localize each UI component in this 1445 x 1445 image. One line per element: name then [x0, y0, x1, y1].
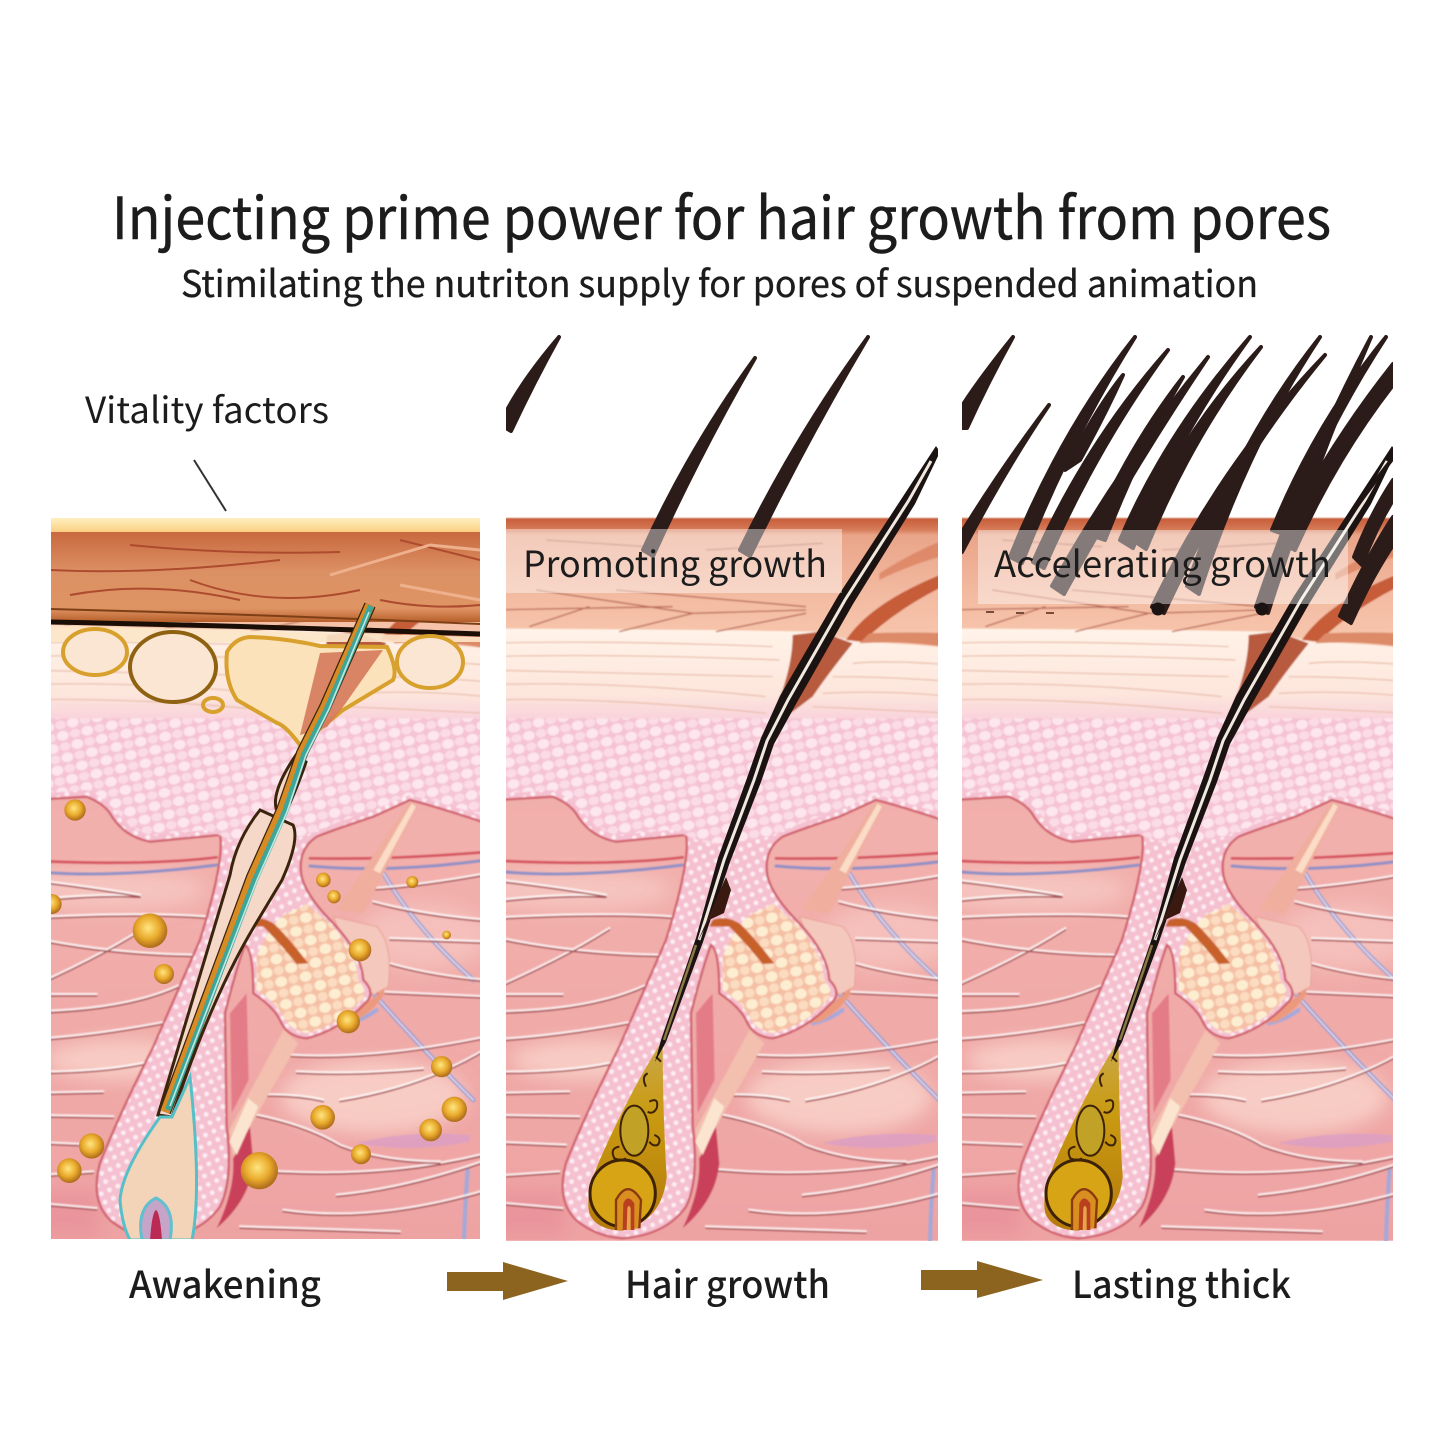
arrow: hair growth to lasting thick — [921, 1261, 1043, 1298]
caption: awakening: Awakening — [129, 1255, 321, 1309]
dense surface hairs — [962, 337, 1393, 623]
caption: lasting thick: Lasting thick — [1072, 1255, 1291, 1309]
caption: hair growth: Hair growth — [625, 1255, 830, 1309]
label: accelerating growth: Accelerating growth — [994, 536, 1331, 588]
callout leader line — [194, 460, 226, 511]
surface hairs — [506, 337, 868, 556]
second long hair strand — [1357, 458, 1393, 510]
black oil line — [51, 622, 480, 634]
dark follicle rings — [275, 755, 306, 808]
hair envelope — [158, 810, 295, 1117]
golden follicle bulb — [588, 1040, 667, 1231]
label: promoting growth: Promoting growth — [523, 536, 827, 588]
translucent label box — [506, 529, 842, 593]
long hair through follicle — [655, 446, 940, 1062]
vitality factors label: Vitality factors — [85, 382, 329, 434]
panel: promoting growth — [506, 335, 938, 1241]
hair root dots — [986, 602, 1268, 616]
oil bubbles — [63, 629, 463, 745]
brown oil layer — [51, 532, 480, 622]
follicle muscle wedge — [300, 650, 383, 735]
teal treatment hair — [165, 605, 371, 1112]
long hair through follicle — [1111, 446, 1396, 1062]
panel: accelerating growth — [962, 335, 1393, 1241]
butter top band — [51, 518, 480, 532]
subtitle: Stimilating the nutriton supply for pores of suspended animation — [181, 254, 1258, 308]
panel: awakening — [51, 518, 480, 1239]
golden nutrient balls — [42, 799, 467, 1189]
arrow: awakening to hair growth — [447, 1262, 568, 1300]
translucent label box — [978, 530, 1348, 604]
golden follicle bulb — [1044, 1040, 1123, 1231]
beige bulb — [120, 1077, 197, 1240]
title: Injecting prime power for hair growth from pores — [112, 172, 1331, 256]
